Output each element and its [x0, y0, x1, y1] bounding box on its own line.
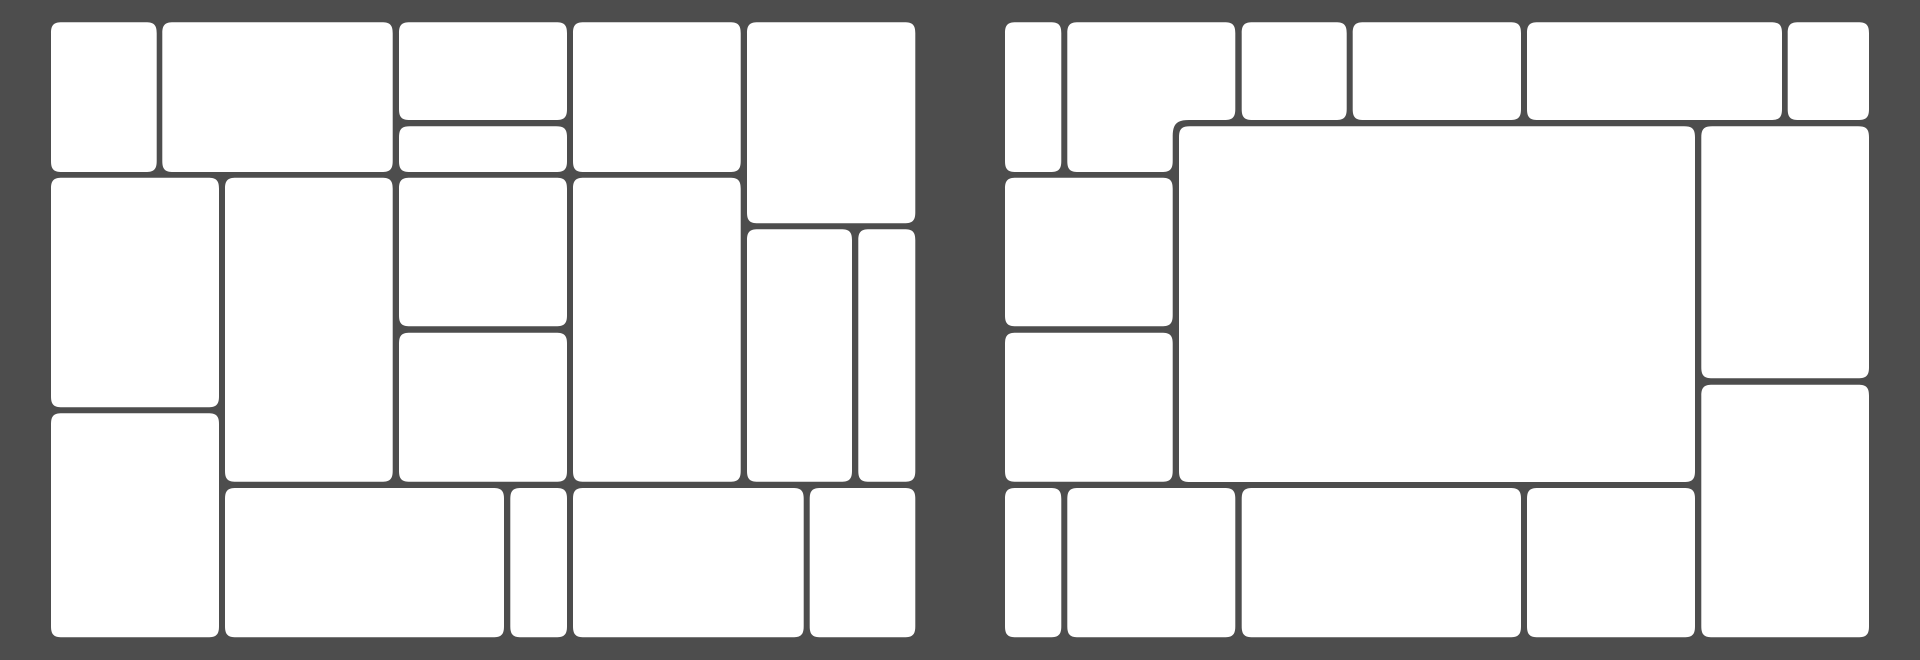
- tile: left grid, column 1 middle: [51, 178, 219, 407]
- tile: left grid, column 4 top: [573, 22, 741, 172]
- tile: left grid, column 2 tall: [225, 178, 393, 482]
- tile: left grid, bottom wide: [225, 488, 504, 637]
- tile: right grid, top-left narrow: [1005, 22, 1061, 172]
- tile: right grid, bottom medium: [1067, 488, 1235, 637]
- tile: left grid, top-left: [51, 22, 157, 172]
- tile: right grid, notched L-shape: [1067, 22, 1235, 172]
- tile: right grid, right column upper: [1701, 126, 1869, 378]
- tile: right grid, bottom medium right: [1527, 488, 1695, 637]
- tile: left grid, column 5 tall left: [747, 229, 852, 482]
- tile: right grid, top medium: [1353, 22, 1521, 120]
- tile: left grid, column 3 top: [399, 22, 567, 120]
- tile: right grid, top small: [1242, 22, 1347, 120]
- tile: left grid, column 5 top: [747, 22, 915, 223]
- tile: left grid, top wide: [162, 22, 393, 172]
- tile: left grid, column 4 tall: [573, 178, 741, 482]
- panel: left grid: [51, 22, 915, 637]
- tile: left grid, bottom wide right: [573, 488, 804, 637]
- tile: left grid, bottom narrow: [510, 488, 567, 637]
- tile: right grid, left column upper: [1005, 178, 1173, 326]
- tile: right grid, bottom wide: [1242, 488, 1521, 637]
- tile: right grid, large centre: [1179, 126, 1695, 482]
- tile: right grid, right column lower: [1701, 385, 1869, 637]
- tile: right grid, top wide: [1527, 22, 1782, 120]
- panel: right grid: [1005, 22, 1869, 637]
- tile: left grid, column 1 bottom: [51, 413, 219, 637]
- tile: right grid, bottom-left narrow: [1005, 488, 1061, 637]
- tile: right grid, top-right small: [1788, 22, 1869, 120]
- tile: left grid, column 3 middle upper: [399, 178, 567, 326]
- tile: left grid, column 5 tall right: [858, 229, 915, 482]
- tile: left grid, bottom-right: [810, 488, 915, 637]
- tile: left grid, column 3 short strip: [399, 126, 567, 172]
- tile: left grid, column 3 middle lower: [399, 333, 567, 482]
- tile: right grid, left column lower: [1005, 333, 1173, 482]
